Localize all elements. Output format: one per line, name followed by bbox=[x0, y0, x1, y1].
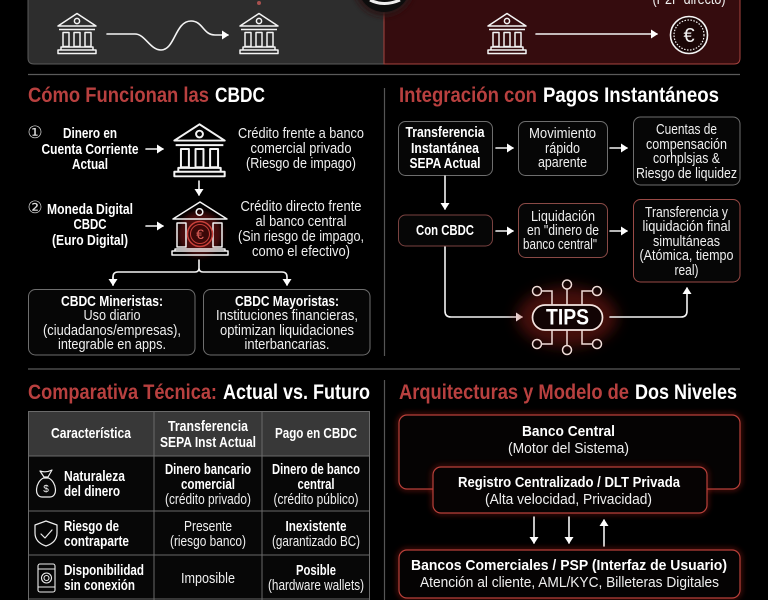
row: naturaleza bbox=[37, 462, 360, 508]
arrow: direct transfer bbox=[536, 33, 657, 35]
box: banco central: (Motor del Sistema) bbox=[508, 441, 629, 457]
panel: cbdc mayoristas: interbancarias. bbox=[244, 337, 330, 353]
box: cuentas: Riesgo de liquidez bbox=[636, 166, 737, 182]
row: riesgo: (riesgo banco) bbox=[170, 534, 246, 550]
row: disponibilidad: Imposible bbox=[181, 571, 235, 587]
step 1 description bbox=[238, 126, 364, 172]
step 2 description bbox=[238, 199, 364, 260]
step 1 text: Dinero en bbox=[63, 126, 117, 142]
heading: Dos Niveles bbox=[635, 380, 737, 404]
arrow: down bbox=[198, 181, 200, 195]
box: bancos comerciales bbox=[399, 550, 740, 598]
heading bbox=[399, 83, 719, 107]
row: naturaleza: central bbox=[298, 477, 334, 493]
icon: central bank with euro bbox=[172, 202, 228, 256]
arrow bbox=[610, 147, 627, 149]
arrow: branch bbox=[113, 260, 287, 285]
icon: shield bbox=[35, 521, 57, 546]
arrow: from tips bbox=[610, 288, 687, 317]
panel: cbdc minoristas: CBDC Mineristas: bbox=[61, 294, 163, 310]
box: banco central: Banco Central bbox=[522, 424, 615, 440]
box: con cbdc: Con CBDC bbox=[416, 223, 474, 239]
icon: phone bbox=[38, 564, 55, 592]
panel: como funcionan bbox=[27, 83, 370, 355]
row: riesgo: Presente bbox=[184, 519, 232, 535]
icon: central emblem bbox=[354, 0, 414, 16]
arrow: down bbox=[444, 176, 446, 209]
box: liquidacion final: liquidación final bbox=[642, 219, 730, 235]
box: con cbdc bbox=[398, 215, 492, 246]
icon: bank origin bbox=[58, 14, 96, 54]
step 1 description: Crédito frente a banco bbox=[238, 126, 364, 142]
row: naturaleza: comercial bbox=[181, 477, 235, 493]
box: registro bbox=[433, 467, 707, 513]
box: liquidacion: banco central" bbox=[523, 237, 597, 253]
step 1 description: comercial privado bbox=[250, 141, 352, 157]
box: cuentas: compensación bbox=[646, 137, 727, 153]
box: banco central bbox=[399, 415, 740, 489]
box: liquidacion final: real) bbox=[674, 263, 698, 279]
icon: central bank with euro: € bbox=[196, 226, 204, 242]
panel: integracion bbox=[398, 83, 740, 354]
table header: Transferencia bbox=[168, 419, 249, 435]
panel: cbdc minoristas: integrable en apps. bbox=[58, 337, 166, 353]
icon: tips: TIPS bbox=[546, 304, 589, 330]
box: registro: (Alta velocidad, Privacidad) bbox=[485, 492, 652, 508]
row: riesgo: Riesgo de bbox=[64, 519, 119, 535]
arrows: between levels bbox=[534, 517, 604, 546]
heading: Arquitecturas y Modelo de bbox=[399, 380, 629, 404]
step 2 description: como el efectivo) bbox=[252, 244, 350, 260]
heading: Comparativa Técnica: bbox=[28, 380, 217, 404]
table header: SEPA Inst Actual bbox=[160, 435, 256, 451]
arrow bbox=[496, 147, 513, 149]
panel: arquitecturas bbox=[399, 380, 740, 598]
row: naturaleza: (crédito privado) bbox=[165, 492, 251, 508]
box: liquidacion: Liquidación bbox=[531, 209, 595, 225]
step 2 text: CBDC bbox=[74, 217, 107, 233]
panel: cbdc minoristas: (ciudadanos/empresas), bbox=[43, 323, 181, 339]
row: riesgo bbox=[35, 519, 360, 550]
icon: tips bbox=[517, 280, 617, 354]
box: liquidacion bbox=[518, 204, 608, 258]
heading: Pagos Instantáneos bbox=[543, 83, 719, 107]
step 1 text bbox=[27, 123, 138, 173]
row: naturaleza: del dinero bbox=[64, 484, 120, 500]
step 2 text: (Euro Digital) bbox=[52, 233, 128, 249]
step 2 description: Crédito directo frente bbox=[240, 199, 362, 215]
panel: cbdc mayoristas: CBDC Mayoristas: bbox=[235, 294, 339, 310]
panel: cbdc minoristas bbox=[28, 290, 195, 355]
icon: bank bbox=[488, 14, 526, 54]
box: movimiento: Movimiento bbox=[529, 126, 596, 142]
heading: CBDC bbox=[215, 83, 265, 107]
box: sepa actual bbox=[398, 122, 492, 176]
step 1 description: (Riesgo de impago) bbox=[246, 156, 356, 172]
table header: Característica bbox=[51, 426, 132, 442]
table header bbox=[51, 419, 357, 451]
row: naturaleza: Naturaleza bbox=[64, 469, 126, 485]
box: liquidacion final bbox=[634, 200, 740, 282]
box: bancos comerciales: Bancos Comerciales / PSP (Interfaz de Usuario) bbox=[411, 558, 727, 574]
heading: Cómo Funcionan las bbox=[28, 83, 209, 107]
box: sepa actual: SEPA Actual bbox=[410, 156, 480, 172]
arrow: to tips bbox=[445, 247, 522, 317]
panel: cbdc minoristas: Uso diario bbox=[84, 308, 140, 324]
step 1 text: Actual bbox=[72, 157, 108, 173]
step 2 text: Moneda Digital bbox=[47, 202, 133, 218]
arrow: to bank 1 bbox=[146, 148, 163, 150]
row: naturaleza: Dinero bancario bbox=[165, 462, 251, 478]
box: sepa actual: Transferencia bbox=[406, 125, 485, 141]
step 2 text bbox=[27, 198, 133, 249]
panel: comparativa bbox=[28, 380, 370, 600]
box: cuentas bbox=[634, 117, 740, 185]
arrow: to bank 2 bbox=[146, 225, 163, 227]
step 2 description: al banco central bbox=[256, 214, 346, 230]
step 2 text: ② bbox=[27, 198, 43, 217]
box: movimiento: rápido bbox=[545, 141, 580, 157]
icon: red dot bbox=[257, 1, 261, 5]
box: liquidacion final: simultáneas bbox=[653, 234, 720, 250]
heading: Integración con bbox=[399, 83, 537, 107]
row: disponibilidad: sin conexión bbox=[64, 578, 135, 594]
arrow bbox=[496, 230, 513, 232]
row: naturaleza: (crédito público) bbox=[274, 492, 358, 508]
row: disponibilidad: Disponibilidad bbox=[64, 563, 144, 579]
box: movimiento bbox=[518, 122, 608, 176]
panel: top current transfer bbox=[28, 0, 384, 64]
step 1 text: ① bbox=[27, 123, 43, 142]
row: disponibilidad: Posible bbox=[296, 563, 336, 579]
box: cuentas: corhplsjas & bbox=[653, 151, 720, 167]
heading: Actual vs. Futuro bbox=[223, 380, 370, 404]
step 2 description: (Sin riesgo de impago, bbox=[238, 229, 364, 245]
arrow bbox=[610, 230, 627, 232]
box: movimiento: aparente bbox=[538, 155, 587, 171]
box: registro: Registro Centralizado / DLT Privada bbox=[458, 475, 681, 491]
icon: euro coin: € bbox=[683, 25, 695, 47]
row: riesgo: (garantizado BC) bbox=[272, 534, 360, 550]
icon: commercial bank bbox=[174, 124, 225, 176]
icon: money bag: $ bbox=[43, 484, 49, 495]
panel: cbdc mayoristas: optimizan liquidaciones bbox=[220, 323, 354, 339]
panel: cbdc mayoristas bbox=[204, 290, 370, 355]
box: cuentas: Cuentas de bbox=[656, 122, 717, 138]
box: liquidacion final: (Atómica, tiempo bbox=[640, 248, 734, 264]
panel: cbdc mayoristas: Instituciones financieras, bbox=[216, 308, 358, 324]
heading bbox=[28, 380, 370, 404]
box: bancos comerciales: Atención al cliente, AML/KYC, Billeteras Digitales bbox=[420, 575, 719, 591]
row: disponibilidad bbox=[38, 563, 364, 594]
table bbox=[28, 411, 370, 600]
row: riesgo: Inexistente bbox=[286, 519, 346, 535]
panel: top cbdc transfer bbox=[384, 0, 740, 64]
icon: euro coin bbox=[670, 16, 708, 54]
icon: money bag bbox=[37, 470, 55, 497]
table header: Pago en CBDC bbox=[275, 426, 357, 442]
step 1 text: Cuenta Corriente bbox=[42, 142, 138, 158]
row: disponibilidad: (hardware wallets) bbox=[268, 578, 364, 594]
icon: bank destination bbox=[240, 14, 278, 54]
row: riesgo: contraparte bbox=[64, 534, 129, 550]
box: liquidacion final: Transferencia y bbox=[645, 205, 729, 221]
arrow: wavy transfer bbox=[107, 21, 228, 50]
box: liquidacion: en "dinero de bbox=[527, 223, 599, 239]
box: sepa actual: Instantánea bbox=[411, 141, 480, 157]
row: naturaleza: Dinero de banco bbox=[272, 462, 360, 478]
